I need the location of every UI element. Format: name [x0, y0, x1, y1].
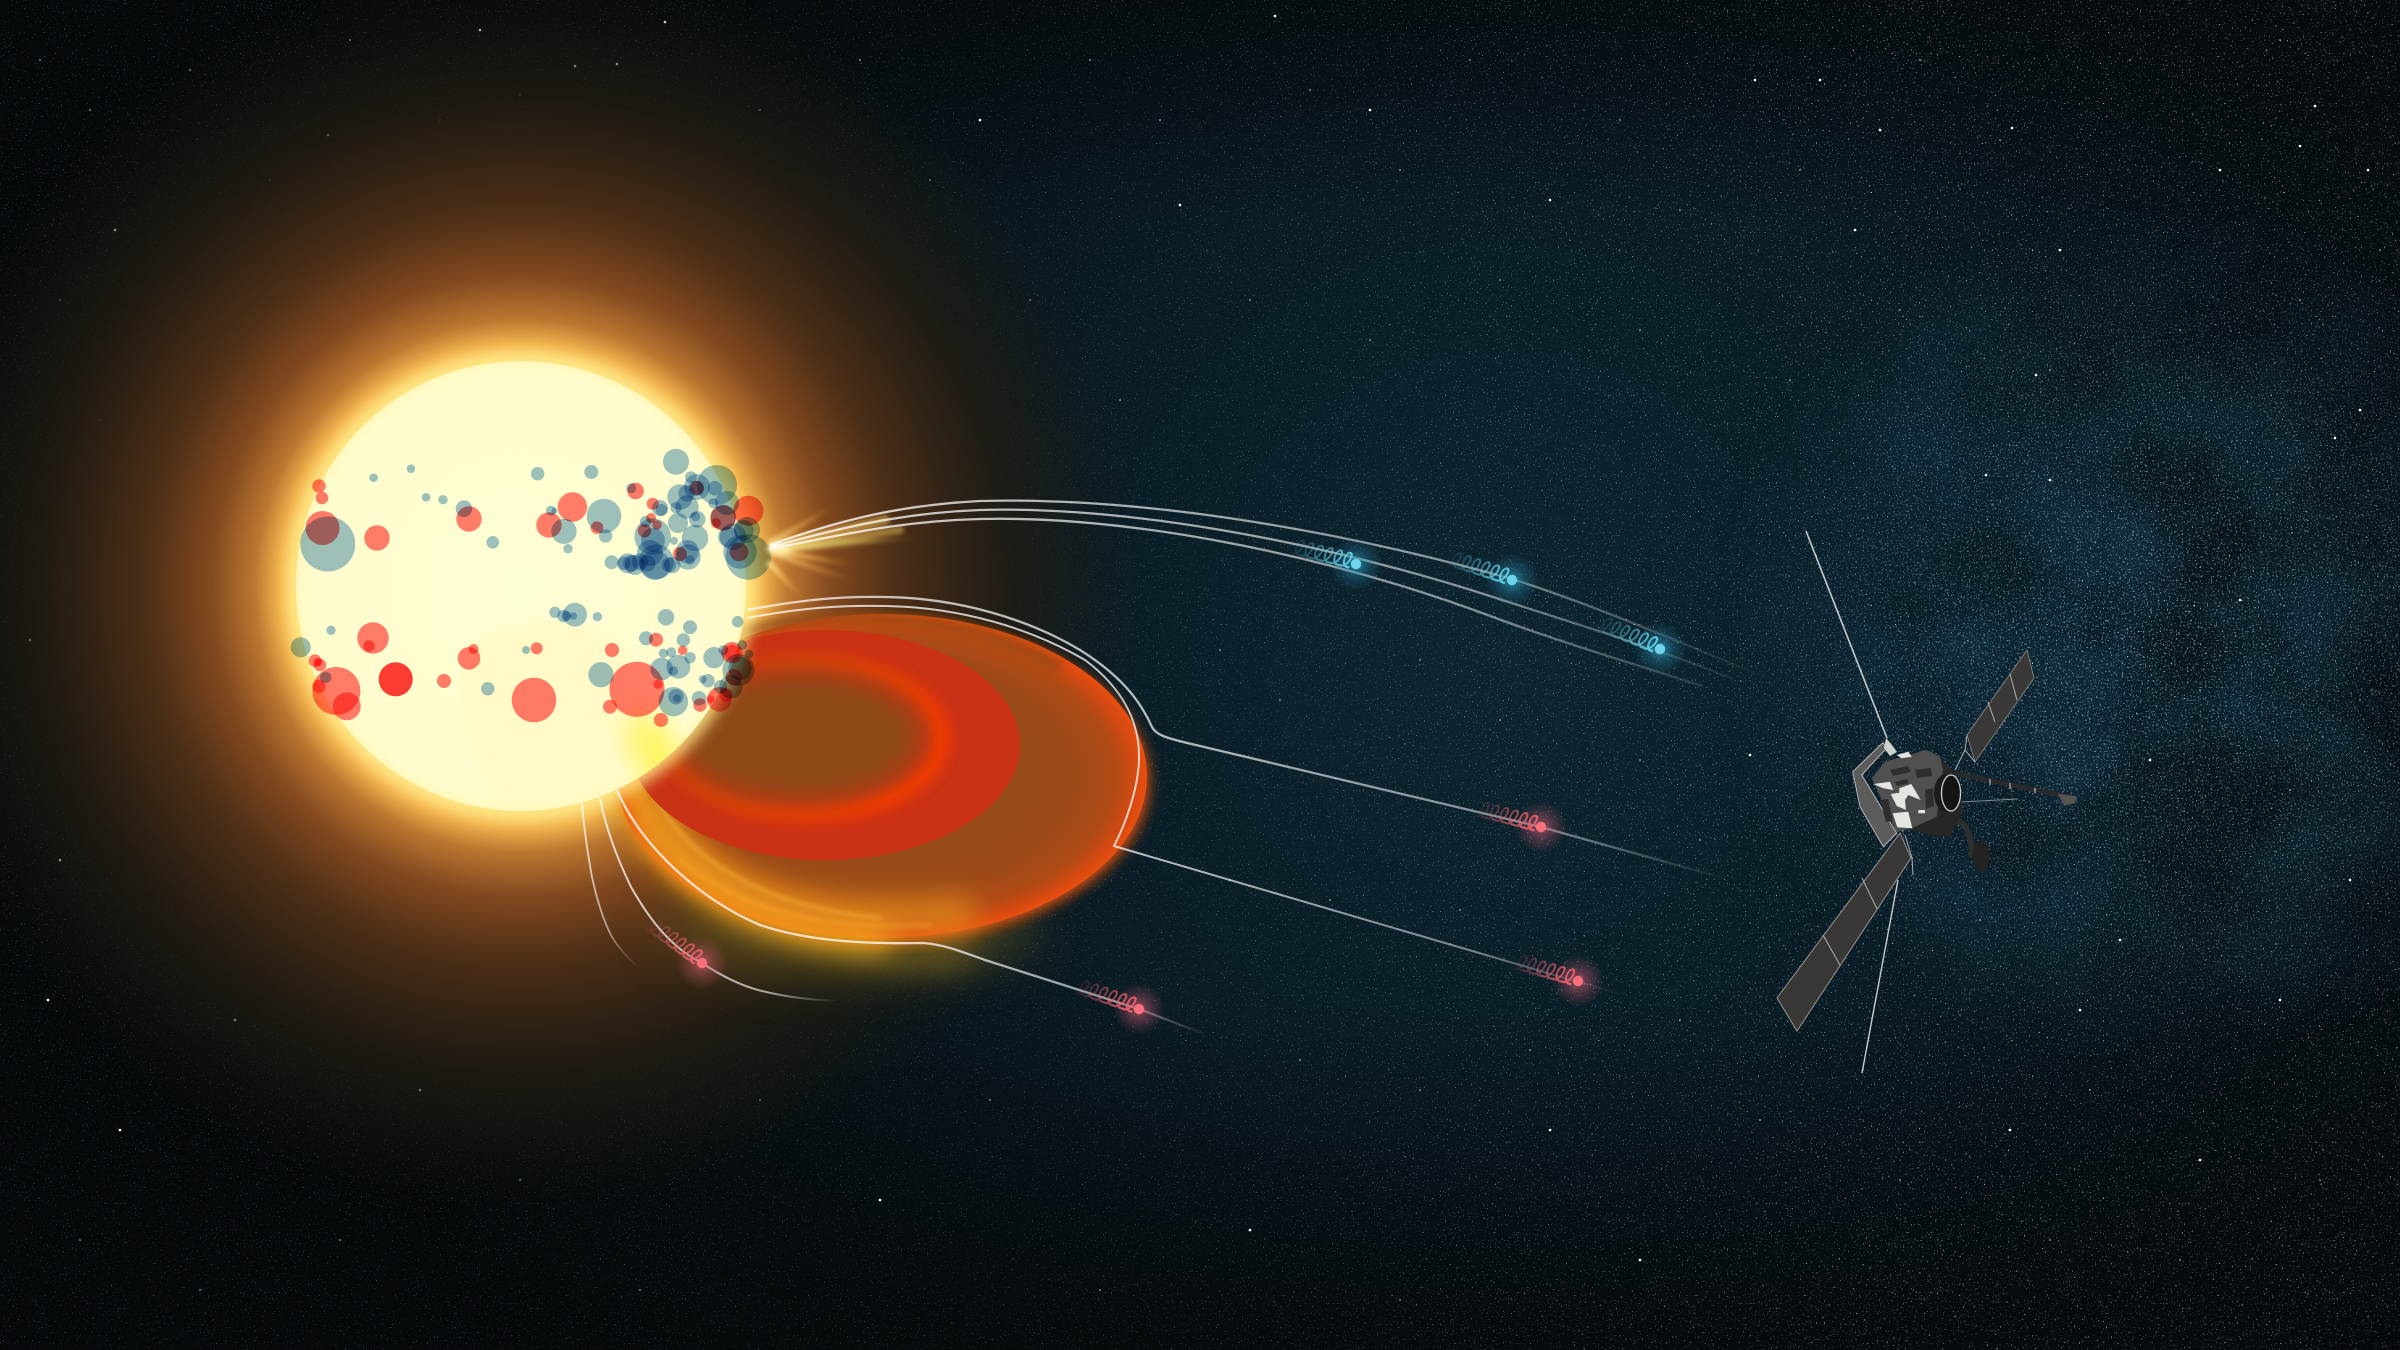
antenna base [1884, 738, 1897, 756]
gold crescent [625, 745, 960, 938]
telescope aperture [1934, 774, 1960, 812]
high gain antenna [1957, 820, 1990, 872]
faint ejection shape through sun [464, 623, 632, 762]
dark rear body [1912, 755, 1963, 837]
inner brown core [674, 672, 922, 800]
sun outer halo [0, 0, 1141, 1206]
hazy star patch [233, 337, 247, 351]
olive glow under ejection [628, 800, 1040, 978]
upper solar panel [1955, 650, 2034, 770]
magnetic field lines: blue particle paths to spacecraft [770, 501, 1770, 686]
heat shield frame [1853, 743, 1897, 847]
body texture patches [1880, 766, 1934, 822]
particle: red 2 [1514, 955, 1604, 1007]
particle: red 3 [1076, 980, 1165, 1035]
particle: blue 3 [1598, 617, 1687, 676]
bubbles: blue events [291, 449, 771, 716]
particle: red 1 [1477, 801, 1567, 853]
coronal mass ejection [617, 614, 1149, 978]
lower solar panel [1777, 815, 1915, 1031]
particle: blue 1 [1292, 537, 1383, 591]
space background [820, 32, 2400, 1246]
inner red shell [630, 630, 1020, 860]
antennas [1806, 531, 2018, 1073]
particle: blue 2 [1449, 552, 1539, 607]
spacecraft [1777, 531, 2076, 1073]
flare glow and spike [766, 505, 923, 599]
outer orange glow [621, 621, 1149, 941]
instrument boom [1938, 770, 2076, 806]
bright inner ring [669, 662, 941, 814]
outer ejection body [617, 614, 1147, 938]
flare burst [766, 505, 923, 599]
particle: red 4 [646, 919, 728, 989]
magnetic field lines: red particle paths around ejection [582, 597, 1730, 1035]
sun disc [288, 353, 754, 830]
dim upper edge [720, 618, 1060, 668]
bubbles: red events [306, 479, 763, 727]
yellow glow at ejection base [619, 705, 691, 799]
textured body [1872, 750, 1943, 832]
white insulation patches [1873, 752, 1925, 828]
